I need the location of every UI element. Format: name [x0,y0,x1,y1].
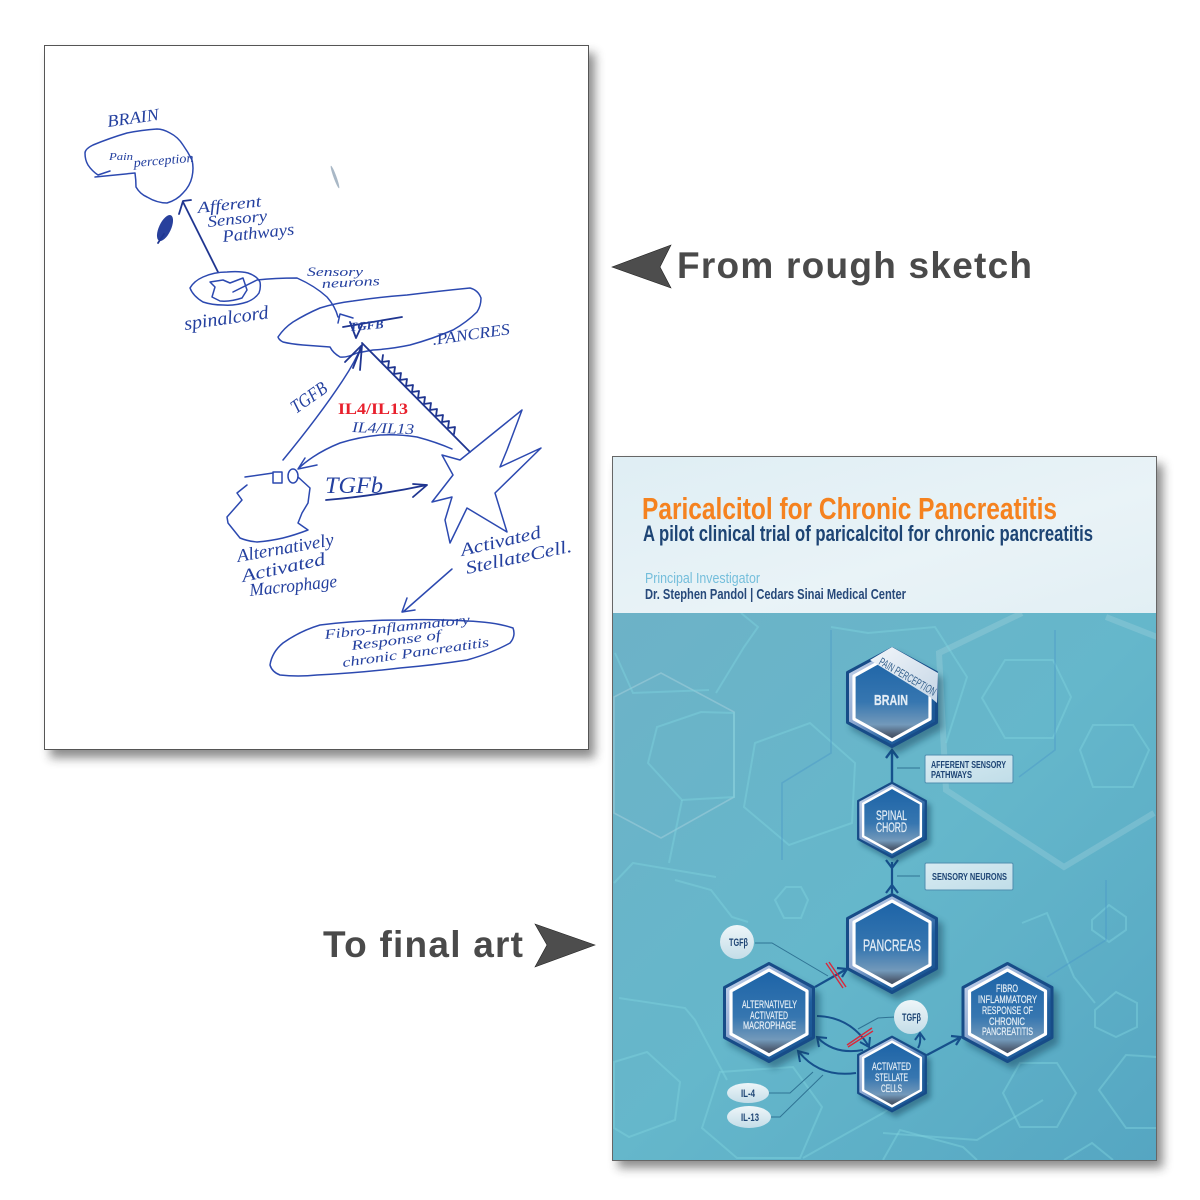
sketch: fibro-inflammatory response ellipse [270,612,514,676]
hexagon: alternatively activated macrophage: MACROPHAGE [743,1020,796,1032]
sketch: afferent sensory pathways arrow [154,193,295,272]
sketch: fibro-inflammatory response ellipse: chronic Pancreatitis [341,635,490,670]
sketch: brain: Pain [108,151,134,163]
hexagon: fibro-inflammatory response of chronic pancreatitis: CHRONIC [989,1016,1025,1028]
arrow: macrophage to pancreas [815,968,847,987]
sketch: brain: BRAIN [106,105,162,131]
panel: final art poster [612,456,1163,1168]
investigator name: Dr. Stephen Pandol | Cedars Sinai Medical Center [645,586,906,603]
sketch: afferent sensory pathways arrow: Sensory [207,208,269,231]
sketch: activated stellate cell: StellateCell. [464,536,573,578]
sketch: afferent sensory pathways arrow: Afferent [195,193,263,217]
sketch: activated stellate cell: Activated [457,522,544,560]
hexagon: spinal chord: SPINAL [876,808,907,823]
arrow: stellate cell to fibro-inflammatory response [927,1036,961,1055]
arrow: pancreas to spinal chord [886,860,898,893]
sketch: TGF-beta arrow to stellate cell [325,473,427,500]
sketch: IL4/IL13 curved arrow [298,420,452,469]
poster title: Paricalcitol for Chronic Pancreatitis [642,491,1057,526]
sketch: brain: perception [132,150,194,170]
hexagon: brain: BRAIN [874,692,908,709]
sketch: sensory neurons [233,264,380,323]
icon: arrow pointing left to sketch [612,245,671,288]
hexagon: alternatively activated macrophage: ALTERNATIVELY [742,999,797,1011]
hexagon: activated stellate cells: CELLS [881,1083,902,1095]
bubble: TGF-beta lower [858,1000,928,1034]
callout: sensory neurons: SENSORY NEURONS [932,871,1007,883]
poster header band [613,457,1156,613]
callout: afferent sensory pathways [897,755,1013,783]
hexagon: activated stellate cells [858,1037,931,1117]
bubble: IL-13: IL-13 [741,1112,759,1124]
hexagon: spinal chord [858,783,931,863]
sketch: IL4/IL13 curved arrow: IL4/IL13 [351,420,414,438]
arrows: macrophage and stellate cell exchange [798,1016,870,1074]
sketch: brain [85,105,194,203]
bubble: IL-13 [727,1075,823,1128]
heading: from rough sketch: From rough sketch [677,245,1032,286]
sketch: TGF-beta arrow to pancreas: TGFB [287,378,332,418]
sketch: arrow to fibro-inflammatory response [402,569,452,612]
callout: afferent sensory pathways: PATHWAYS [931,769,972,781]
sketch: spinal cord: spinalcord [183,302,270,335]
poster diagram background [613,613,1156,1160]
sketch: sensory neurons: neurons [321,273,380,291]
sketch: pancreas: TGFB [349,317,384,334]
sketch: TGF-beta arrow to stellate cell: TGFb [325,473,383,498]
ribbon: pain perception [870,647,938,703]
sketch: alternatively activated macrophage: Alternatively [234,529,335,566]
callout: sensory neurons [897,863,1013,890]
sketch: fibro-inflammatory response ellipse: Fibro-Inflammatory [322,612,471,642]
sketch: alternatively activated macrophage: Macrophage [247,571,338,600]
hexagon: brain [848,648,943,754]
hexagon: fibro-inflammatory response of chronic pancreatitis: RESPONSE OF [982,1005,1033,1017]
bubble: TGF-beta upper: TGFβ [729,937,748,949]
principal investigator label: Principal Investigator [645,570,760,587]
sketch: alternatively activated macrophage: Activated [238,548,328,586]
heading: to final art: To final art [323,924,523,965]
hexagon: fibro-inflammatory response of chronic pancreatitis: INFLAMMATORY [978,994,1037,1006]
arrow: stellate cell to TGF-beta [915,1033,925,1048]
hexagon: activated stellate cells: STELLATE [875,1072,908,1084]
sketch: pancreas [278,288,511,357]
hexagon: fibro-inflammatory response of chronic pancreatitis [963,964,1058,1069]
sketch: stellate to pancreas scribbled arrow [362,343,470,452]
hexagon: fibro-inflammatory response of chronic pancreatitis: FIBRO [996,983,1018,995]
sketch: sensory neurons: Sensory [307,264,363,279]
bubble: IL-4: IL-4 [741,1088,756,1100]
sketch: alternatively activated macrophage [227,469,338,600]
inhibition marks: red double lines [826,962,873,1047]
sketch: spinal cord [183,272,270,335]
hexagon: pancreas [848,894,943,1000]
bubble: TGF-beta lower: TGFβ [902,1012,921,1024]
icon: arrow pointing right to final art [535,924,595,967]
panel: rough sketch page [44,46,595,758]
sketch: TGF-beta arrow to pancreas [283,345,362,460]
hexagon: pancreas: PANCREAS [863,936,921,955]
sketch: red label IL4/IL13: IL4/IL13 [338,401,408,418]
arrow: spinal chord to brain [886,750,898,782]
sketch: activated stellate cell [432,410,573,578]
callout: afferent sensory pathways: AFFERENT SENSORY [931,759,1006,771]
bubble: TGF-beta upper [720,925,828,976]
sketch: afferent sensory pathways arrow: Pathways [220,220,295,246]
sketch: pancreas: .PANCRES [431,321,511,349]
hexagon: spinal chord: CHORD [876,820,907,835]
hexagon: fibro-inflammatory response of chronic pancreatitis: PANCREATITIS [982,1026,1033,1038]
sketch: fibro-inflammatory response ellipse: Response of [349,627,445,653]
hexagon: activated stellate cells: ACTIVATED [872,1061,911,1073]
ribbon: pain perception: PAIN PERCEPTION [876,656,938,699]
hexagon: alternatively activated macrophage: ACTIVATED [750,1010,788,1022]
hexagon: alternatively activated macrophage [724,964,820,1069]
bubble: IL-4 [727,1072,813,1103]
